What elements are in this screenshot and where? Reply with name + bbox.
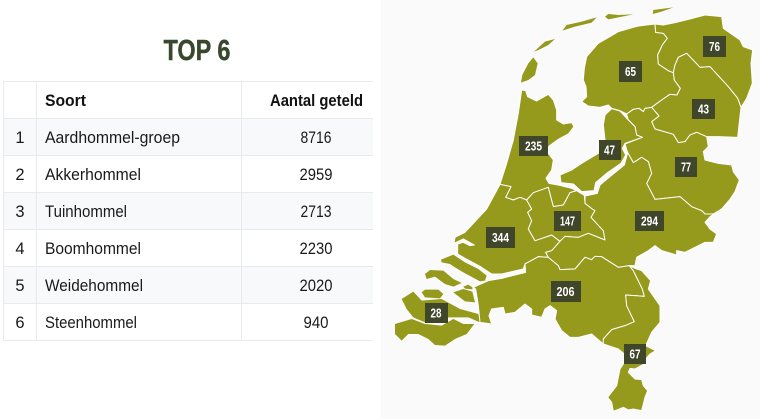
row 6 [15, 314, 328, 332]
row 1: 8716 [300, 129, 332, 147]
label: 235: 235 [525, 140, 542, 154]
province: Flevoland [560, 109, 642, 192]
label: 43 [692, 99, 715, 119]
label: 47: 47 [604, 144, 615, 158]
row 3: Tuinhommel [45, 203, 127, 221]
row 4: 2230 [300, 240, 332, 258]
row 3 [15, 203, 332, 221]
row 3: 3 [15, 203, 25, 221]
label: 28 [425, 303, 448, 323]
province: Utrecht [527, 187, 605, 241]
province: Friesland [582, 24, 680, 114]
label: 147: 147 [560, 214, 575, 228]
map of the Netherlands [395, 7, 753, 411]
label: 65 [619, 61, 642, 82]
row 1: Aardhommel-groep [45, 129, 180, 147]
province: Noord-Brabant [473, 256, 644, 344]
row 1: 1 [15, 129, 25, 147]
table zebra rows [3, 118, 373, 303]
label: 235 [519, 136, 548, 156]
row 3: 2713 [300, 203, 332, 221]
label: 43: 43 [698, 102, 709, 116]
row 4: 4 [15, 240, 25, 258]
label: 294: 294 [641, 214, 658, 228]
table [3, 81, 373, 341]
label: 77: 77 [681, 160, 691, 174]
province: Limburg [603, 266, 660, 411]
row 2: Akkerhommel [45, 166, 141, 184]
province: Groningen [655, 15, 753, 107]
Zuid-Holland islands and Zeeland [395, 255, 487, 346]
label: 77 [675, 157, 697, 177]
label: 76: 76 [709, 40, 720, 54]
label: 294 [635, 211, 664, 231]
row 6: 6 [15, 314, 25, 332]
label: 206 [551, 281, 581, 302]
row 5: 2020 [300, 277, 332, 295]
row 6: 940 [304, 314, 328, 332]
province: Noord-Holland [500, 90, 577, 207]
table header: Soort [45, 92, 86, 110]
label: 76 [703, 36, 726, 57]
label: 67 [624, 344, 646, 364]
row 2: 2 [15, 166, 25, 184]
map count labels [425, 36, 726, 364]
label: 65: 65 [625, 65, 636, 79]
label: 344: 344 [492, 231, 509, 245]
Wadden islands [521, 7, 673, 83]
label: 344 [486, 227, 515, 248]
label: 147 [554, 211, 581, 231]
label: 206: 206 [556, 285, 575, 299]
province: Gelderland [546, 153, 722, 270]
title: TOP 6 [164, 35, 230, 67]
row 1 [15, 129, 332, 147]
row 4 [15, 240, 332, 258]
row 6: Steenhommel [45, 314, 137, 332]
row 2: 2959 [300, 166, 332, 184]
row 5: Weidehommel [45, 277, 143, 295]
row 5 [15, 277, 332, 295]
row 4: Boomhommel [45, 240, 141, 258]
label: 28: 28 [430, 306, 442, 320]
table header [45, 92, 363, 110]
label: 47 [599, 140, 621, 160]
label: 67: 67 [630, 348, 641, 362]
province: Zuid-Holland [454, 184, 560, 274]
province: Overijssel [625, 107, 739, 214]
table header: Aantal geteld [270, 92, 363, 110]
row 2 [15, 166, 332, 184]
province: Drenthe [652, 53, 741, 143]
row 5: 5 [15, 277, 25, 295]
map background panel [381, 0, 760, 419]
